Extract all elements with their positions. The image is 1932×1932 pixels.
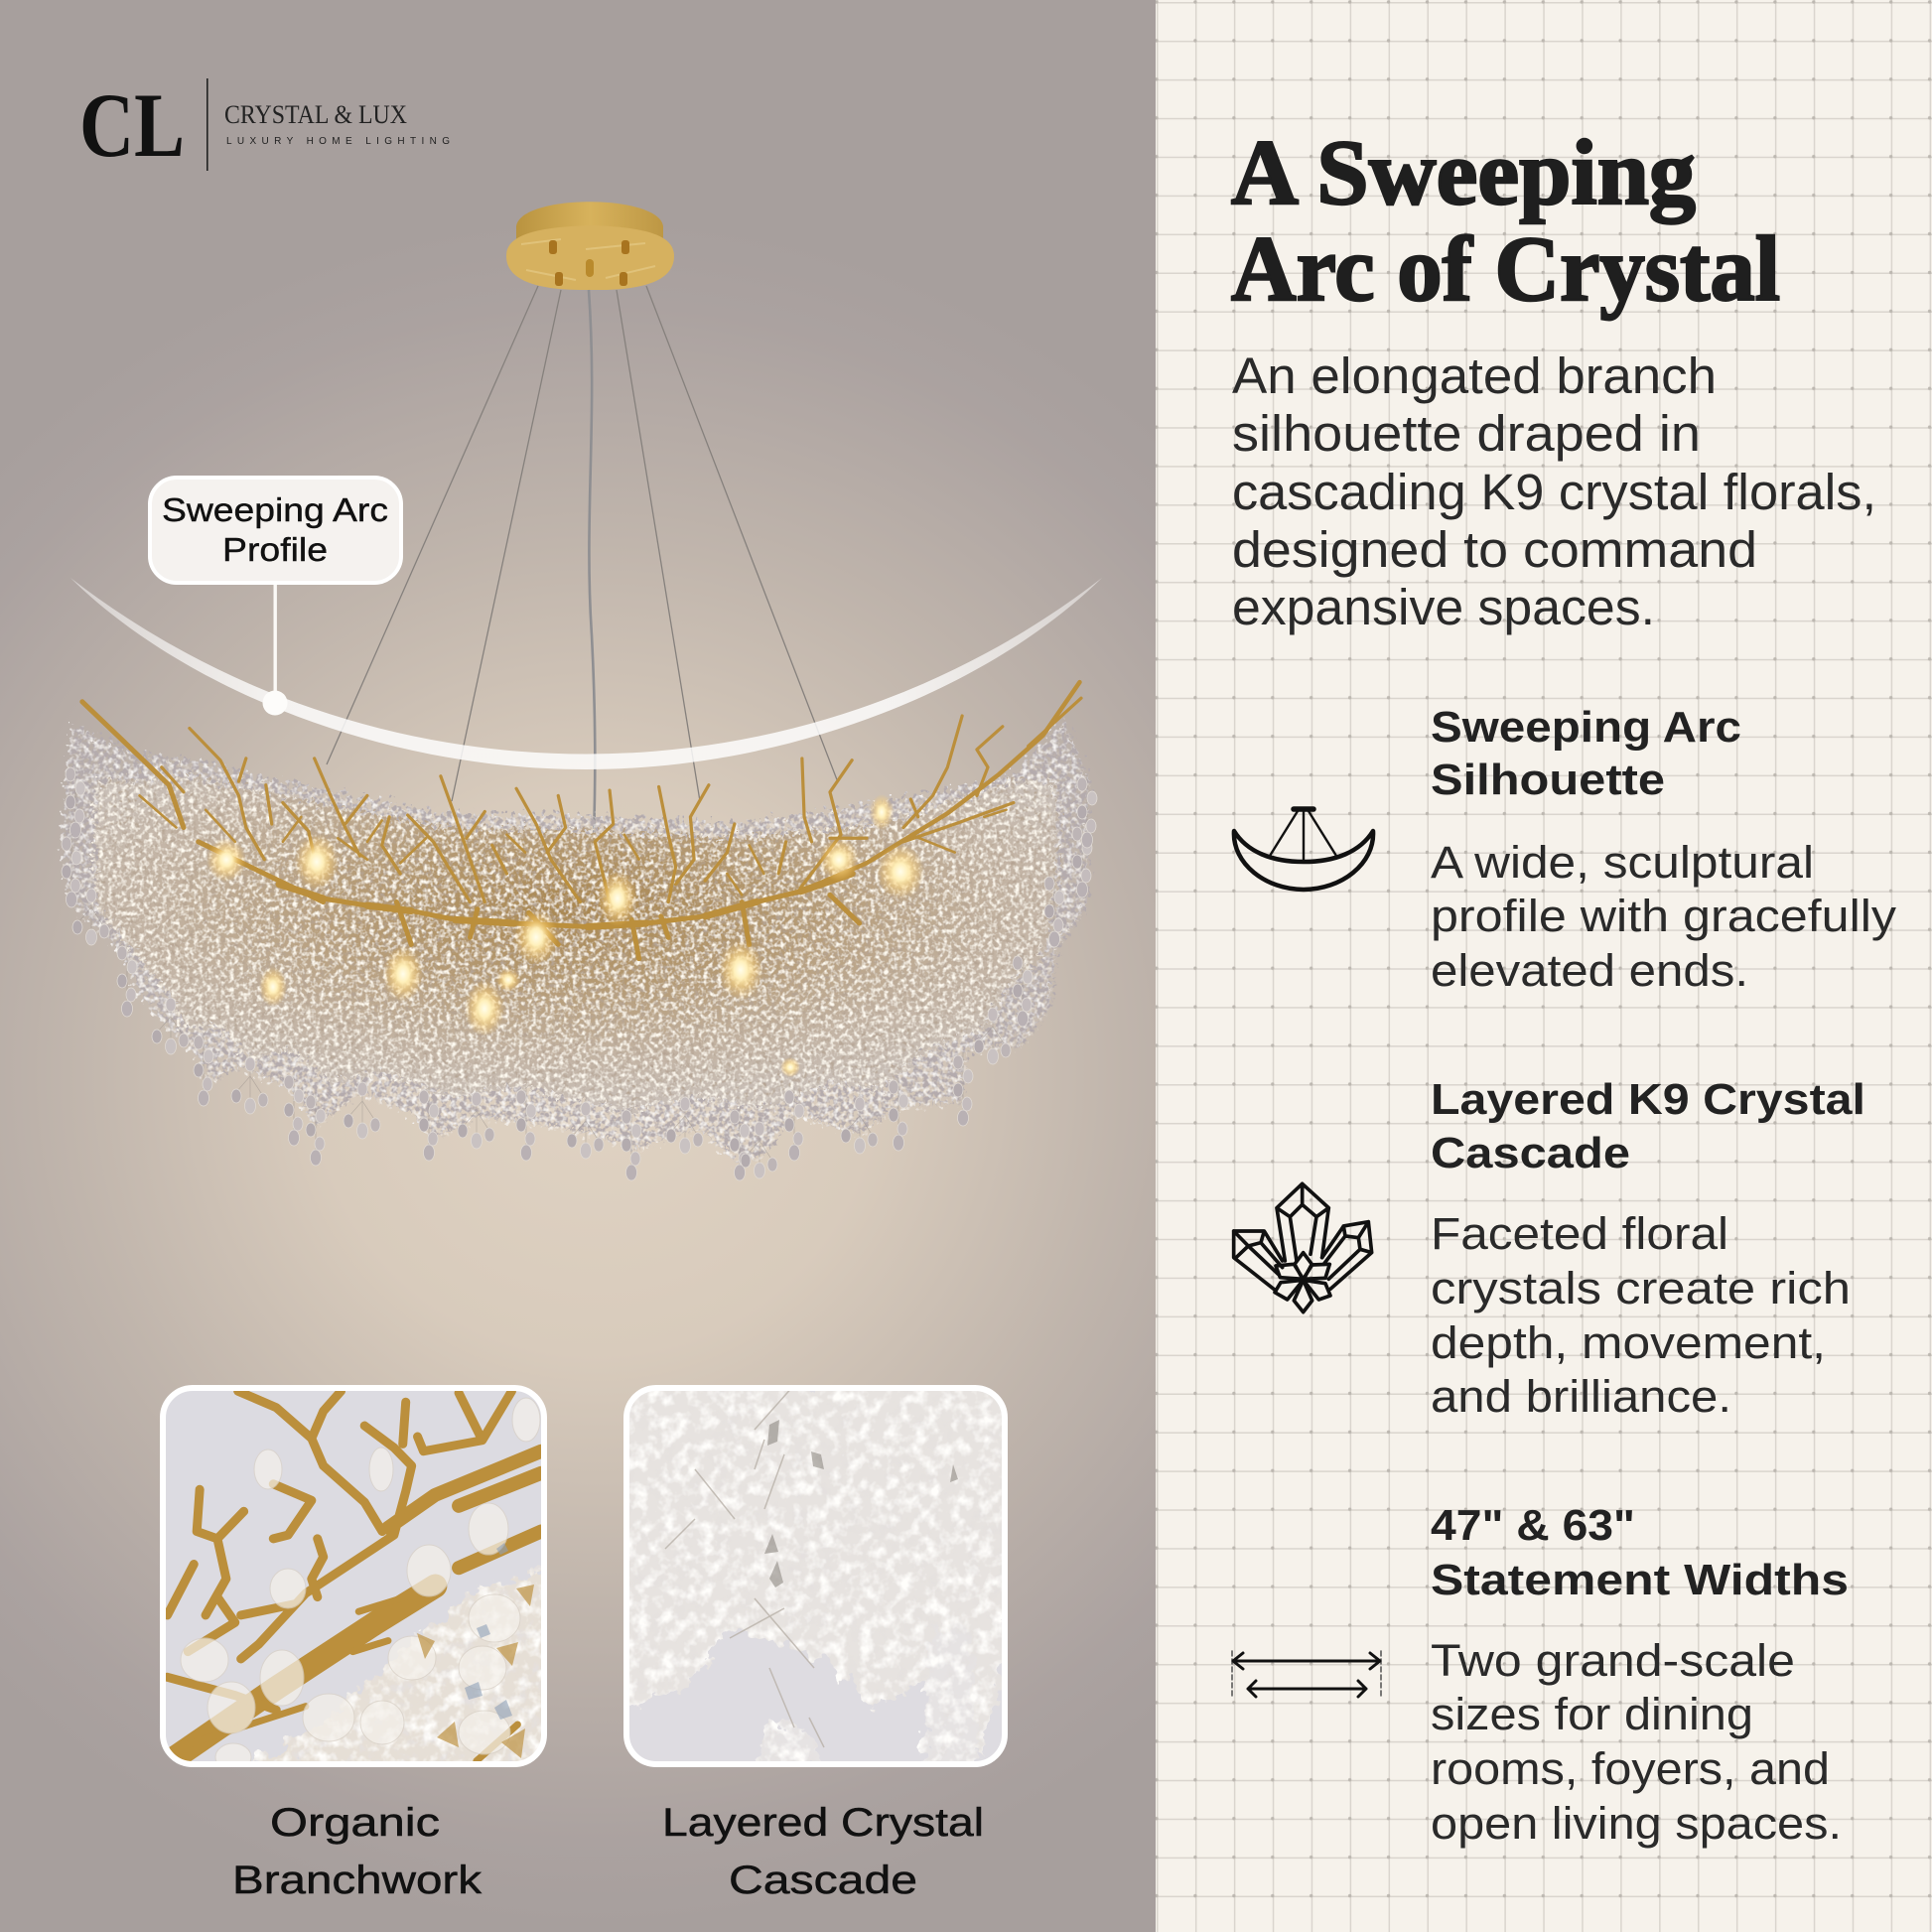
feature: statement widths xyxy=(1232,1501,1849,1849)
intro paragraph: An elongated branch xyxy=(1232,347,1717,404)
dense crystal mass xyxy=(95,778,1057,1111)
feature description: Faceted floral xyxy=(1431,1208,1728,1259)
heading: A Sweeping xyxy=(1231,122,1696,224)
logo wordmark: CRYSTAL & LUX xyxy=(224,100,407,129)
detail photo: layered crystal cascade xyxy=(616,1385,1013,1767)
feature title xyxy=(1431,1075,1865,1177)
feature description: profile with gracefully xyxy=(1431,891,1897,941)
sparse outer crystals xyxy=(63,721,1091,1168)
feature: layered K9 crystal cascade xyxy=(1234,1075,1865,1422)
caption: organic branchwork: Branchwork xyxy=(232,1859,483,1902)
feature title: Cascade xyxy=(1431,1129,1630,1177)
feature description: elevated ends. xyxy=(1431,945,1748,996)
caption: layered crystal cascade: Layered Crystal xyxy=(662,1801,984,1845)
feature description: open living spaces. xyxy=(1431,1798,1842,1849)
sweeping arc overlay xyxy=(70,578,1102,769)
icon: width arrows xyxy=(1232,1651,1381,1698)
caption: organic branchwork xyxy=(232,1801,483,1902)
intro paragraph: expansive spaces. xyxy=(1232,579,1655,635)
feature title: Sweeping Arc xyxy=(1431,703,1741,752)
intro paragraph: silhouette draped in xyxy=(1232,405,1701,462)
icon: crystal cluster xyxy=(1234,1183,1372,1312)
chandelier body xyxy=(62,682,1097,1180)
feature title: 47" & 63" xyxy=(1431,1501,1635,1550)
feature description: A wide, sculptural xyxy=(1431,837,1814,888)
intro paragraph: cascading K9 crystal florals, xyxy=(1232,464,1876,520)
pale crystals on lower right xyxy=(248,1569,557,1767)
feature title: Statement Widths xyxy=(1431,1556,1849,1604)
feature title xyxy=(1431,1501,1849,1604)
feature description: sizes for dining xyxy=(1431,1689,1753,1739)
intro paragraph: designed to command xyxy=(1232,521,1757,578)
feature description: Two grand-scale xyxy=(1431,1635,1795,1686)
feature description: and brilliance. xyxy=(1431,1371,1731,1422)
caption: layered crystal cascade xyxy=(662,1801,984,1902)
suspension wires xyxy=(327,286,838,838)
logo tagline: LUXURY HOME LIGHTING xyxy=(226,136,450,147)
callout: sweeping arc profile: Profile xyxy=(222,531,328,568)
panel: text background with grid xyxy=(1156,0,1932,1932)
logo monogram: CL xyxy=(79,74,185,176)
intro paragraph xyxy=(1232,347,1876,635)
feature description: depth, movement, xyxy=(1431,1317,1826,1368)
feature title: Layered K9 Crystal xyxy=(1431,1075,1865,1124)
callout: sweeping arc profile xyxy=(150,478,401,715)
heading: Arc of Crystal xyxy=(1231,218,1780,321)
callout label: Sweeping Arc xyxy=(162,491,388,528)
gold branches xyxy=(82,682,1081,959)
feature description: rooms, foyers, and xyxy=(1431,1743,1830,1794)
detail photo: organic branchwork xyxy=(160,1385,557,1771)
feature description xyxy=(1431,1635,1842,1849)
caption: layered crystal cascade: Cascade xyxy=(729,1859,917,1902)
feature description xyxy=(1431,837,1897,996)
feature title xyxy=(1431,703,1741,804)
caption: organic branchwork: Organic xyxy=(270,1801,440,1845)
logo xyxy=(79,74,450,176)
feature title: Silhouette xyxy=(1431,756,1665,804)
heading xyxy=(1231,122,1780,321)
feature: sweeping arc silhouette xyxy=(1234,703,1897,996)
icon: crescent chandelier xyxy=(1234,809,1373,890)
panel: photo background xyxy=(0,0,1156,1932)
chandelier canopy xyxy=(506,202,674,290)
light bulbs xyxy=(207,794,924,1077)
hanging crystal strands xyxy=(62,764,1097,1180)
feature description xyxy=(1431,1208,1851,1422)
feature description: crystals create rich xyxy=(1431,1263,1851,1313)
